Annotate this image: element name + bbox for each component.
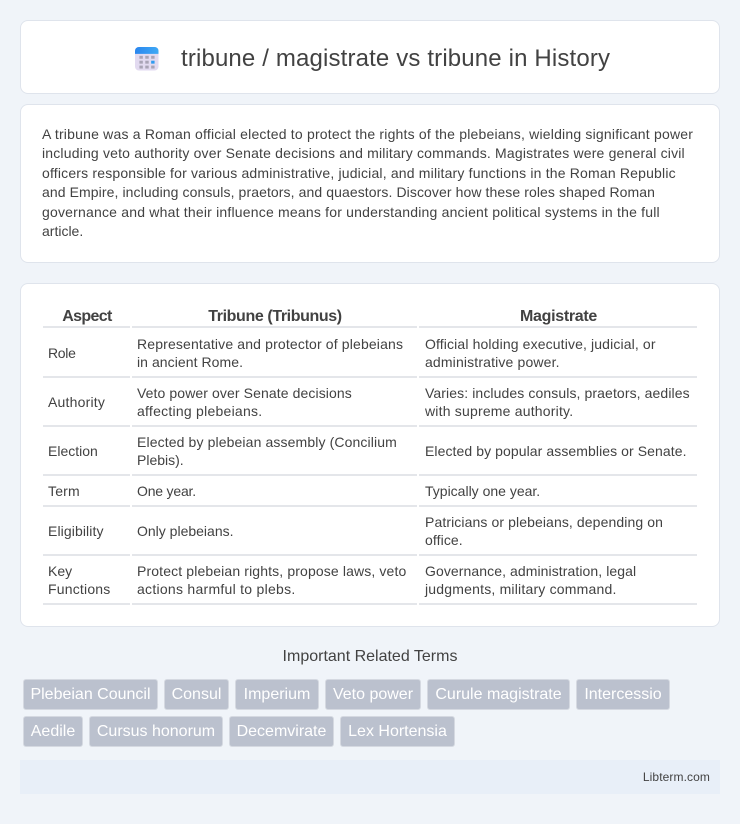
row: Term: Typically one year. [425,483,540,499]
row: Election: Elected by plebeian assembly (Concilium [137,434,397,450]
row: Election: Elected by popular assemblies or Senate. [425,443,687,459]
comparison table card [20,283,720,627]
footer bar [20,760,720,794]
intro text: governance and what their influence means for understanding ancient political systems in the full [42,204,660,220]
tag: Cursus honorum [97,723,215,740]
tag [23,679,158,710]
row: Authority: with supreme authority. [425,403,573,419]
row: Authority: Veto power over Senate decisions [137,385,352,401]
intro card [20,104,720,263]
tag: Consul [172,686,221,703]
row: Term: One year. [137,483,196,499]
row: Key Functions [43,563,697,605]
row: Authority: affecting plebeians. [137,403,262,419]
row: Role: Official holding executive, judicial, or [425,336,656,352]
row: Election: Election [48,443,98,459]
row: Key Functions: Protect plebeian rights, propose laws, veto [137,563,406,579]
footer credit: Libterm.com [643,770,710,784]
row: Role [43,336,697,378]
title: tribune / magistrate vs tribune in History [181,45,610,72]
tag: Imperium [244,686,310,703]
row: Authority [43,385,697,427]
intro text: article. [42,223,83,239]
tag: Intercessio [584,686,662,703]
row: Key Functions: judgments, military command. [425,581,617,597]
row: Role: administrative power. [425,354,560,370]
tag [325,679,421,710]
row: Authority: Authority [48,394,105,410]
tag: Plebeian Council [30,686,151,703]
row: Eligibility: Eligibility [48,523,104,539]
row: Role: Representative and protector of plebeians [137,336,403,352]
tag [340,716,455,747]
tag: Decemvirate [237,723,326,740]
tag: Aedile [31,723,75,740]
row: Authority: Varies: includes consuls, praetors, aediles [425,385,690,401]
related terms tags [23,679,670,747]
row: Term: Term [48,483,80,499]
row: Key Functions: Governance, administration, legal [425,563,636,579]
intro text [42,126,693,239]
table header: Tribune (Tribunus) [208,308,342,325]
tag [229,716,334,747]
tag [427,679,570,710]
row: Election: Plebis). [137,452,184,468]
tag [23,716,83,747]
tag [576,679,670,710]
row: Key Functions: actions harmful to plebs. [137,581,296,597]
row: Term [43,483,697,507]
tag: Curule magistrate [435,686,562,703]
row: Eligibility: office. [425,532,463,548]
row: Role: in ancient Rome. [137,354,243,370]
row: Election [43,434,697,476]
tag [164,679,229,710]
intro text: A tribune was a Roman official elected to protect the rights of the plebeians, wielding significant power [42,126,693,142]
header card [20,20,720,94]
row: Eligibility: Patricians or plebeians, depending on [425,514,663,530]
row: Eligibility [43,514,697,556]
row: Role: Role [48,345,76,361]
row: Eligibility: Only plebeians. [137,523,234,539]
table header [43,308,697,328]
table header: Magistrate [520,308,597,325]
intro text: including veto authority over Senate decisions and military commands. Magistrates were general civil [42,145,685,161]
related terms heading: Important Related Terms [283,648,457,665]
tag [235,679,319,710]
intro text: officers responsible for various administrative, judicial, and military functions in the Roman Republic [42,165,676,181]
tag: Veto power [333,686,413,703]
tag [89,716,223,747]
row: Key Functions: Functions [48,581,110,597]
table header: Aspect [62,308,112,325]
tag: Lex Hortensia [348,723,447,740]
intro text: and Empire, including consuls, praetors, and quaestors. Discover how these roles shaped Roman [42,184,655,200]
icon: calendar [135,47,158,70]
row: Key Functions: Key [48,563,72,579]
